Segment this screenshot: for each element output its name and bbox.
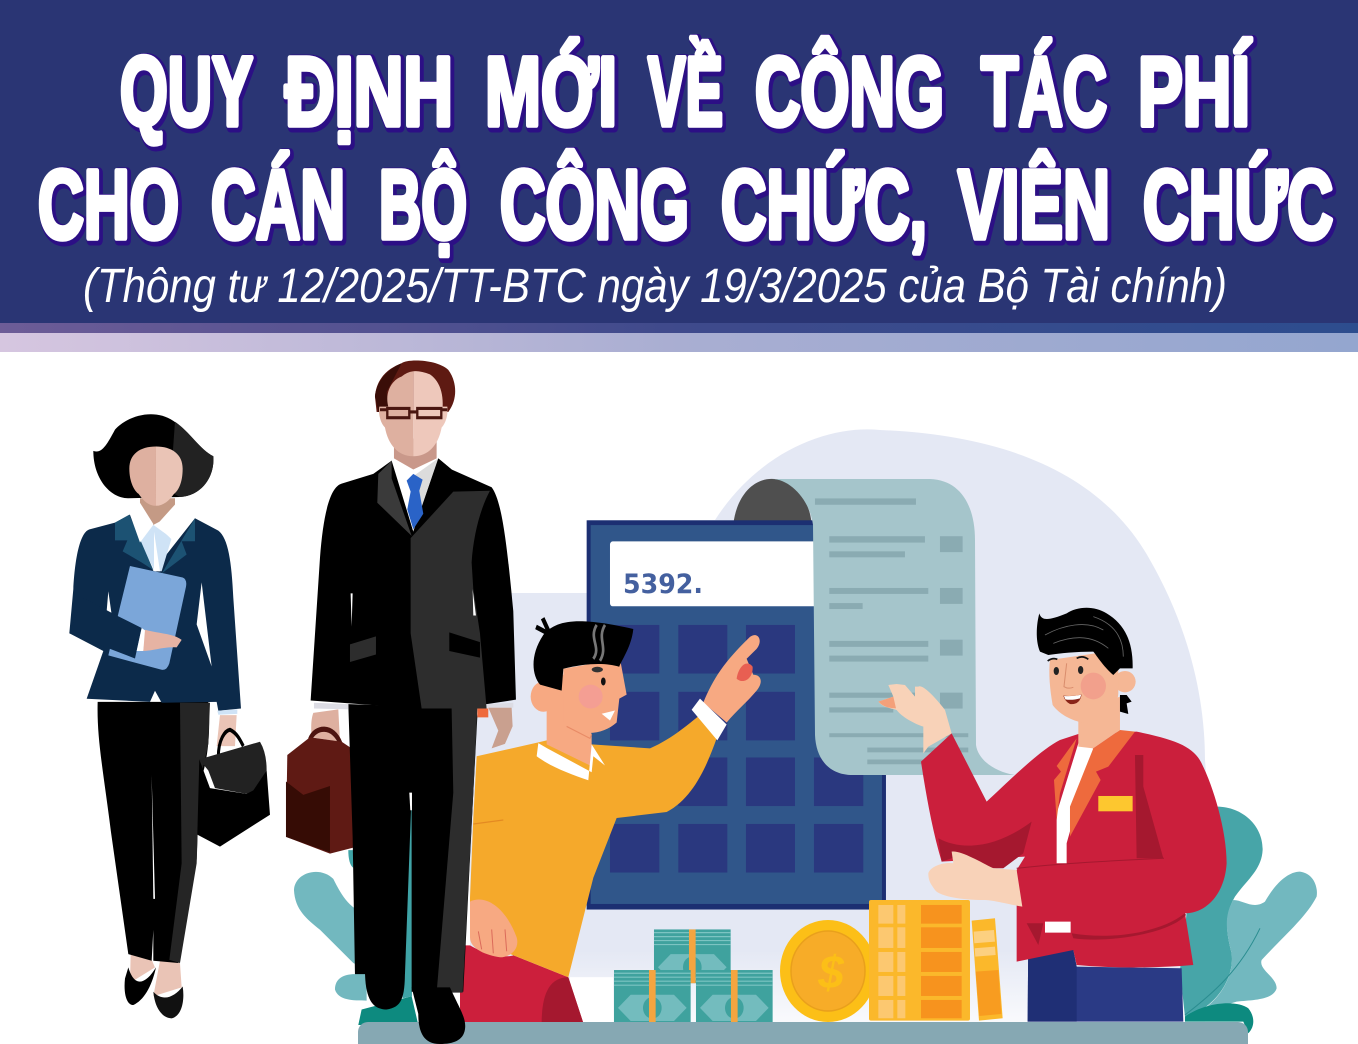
title: PHÍ (1138, 37, 1252, 146)
woman in navy suit (69, 414, 270, 1018)
title: ĐỊNH (287, 39, 455, 148)
glasses (380, 408, 447, 418)
neck, collar and tie (394, 439, 437, 470)
title: VỀ (648, 37, 723, 146)
head (1078, 697, 1120, 748)
subtitle: (Thông tư 12/2025/TT-BTC ngày 19/3/2025 của Bộ Tài chính) (83, 260, 1227, 313)
arm and pointing hand (703, 635, 761, 722)
title: PHÍ (1140, 39, 1254, 148)
jacket (921, 732, 1227, 967)
presenter in red jacket (878, 608, 1227, 1022)
trousers (348, 704, 477, 992)
collar (537, 743, 605, 780)
title: VỀ (650, 39, 725, 148)
receipt (772, 479, 1015, 775)
legs and shoes (130, 954, 182, 996)
title: VIÊN (960, 152, 1112, 261)
head (93, 414, 213, 498)
title: BỘ (381, 152, 469, 261)
left plant (294, 793, 418, 1025)
neck and shirt (140, 498, 175, 525)
title: MỚI (487, 39, 619, 148)
forearm and hand (69, 598, 142, 658)
table (358, 1022, 1248, 1044)
title: CÔNG (502, 152, 691, 261)
head (547, 675, 592, 766)
title: TÁC (983, 39, 1109, 148)
briefcase (310, 729, 341, 744)
coin stacks (869, 900, 1003, 1021)
title: CÁN (213, 152, 347, 261)
hand on knee (470, 900, 517, 957)
hands (928, 851, 1022, 907)
hands (311, 709, 340, 742)
man in black suit (286, 361, 516, 1044)
title: CÔNG (757, 39, 946, 148)
title: QUY (122, 39, 255, 148)
title: QUY (120, 37, 253, 146)
money stacks (570, 929, 773, 1024)
title: MỚI (485, 37, 617, 146)
title: CHO (40, 152, 181, 261)
lapels (115, 515, 153, 570)
hand and handbag (217, 715, 237, 746)
title: CHỨC, (721, 150, 927, 259)
title (38, 37, 1335, 261)
collar (130, 503, 153, 543)
name badge (1098, 796, 1133, 811)
header band (0, 0, 1358, 352)
background blob (470, 429, 1207, 1022)
calculator (587, 479, 886, 910)
folder (108, 566, 186, 670)
head (375, 361, 455, 412)
gold coin: $ (817, 946, 844, 998)
shoes (365, 970, 405, 1009)
jacket (311, 458, 516, 709)
man in yellow sweater (460, 618, 761, 1023)
jacket (69, 515, 241, 711)
title: CHỨC, (723, 152, 929, 261)
title: CÔNG (500, 150, 689, 259)
title: TÁC (981, 37, 1107, 146)
red trousers (460, 945, 583, 1023)
shirt and lapels (1057, 743, 1093, 863)
title: CÔNG (755, 37, 944, 146)
right plant (1180, 807, 1317, 1033)
title: VIÊN (958, 150, 1110, 259)
calculator display number: 5392. (623, 569, 703, 600)
title: CÁN (211, 150, 345, 259)
sweater (470, 713, 717, 977)
trousers (1028, 933, 1183, 1022)
orange detail behind suit (473, 613, 488, 717)
trousers (98, 702, 209, 963)
gold coin (780, 920, 876, 1022)
title: ĐỊNH (285, 37, 453, 146)
title: CHO (38, 150, 179, 259)
title: BỘ (379, 150, 467, 259)
